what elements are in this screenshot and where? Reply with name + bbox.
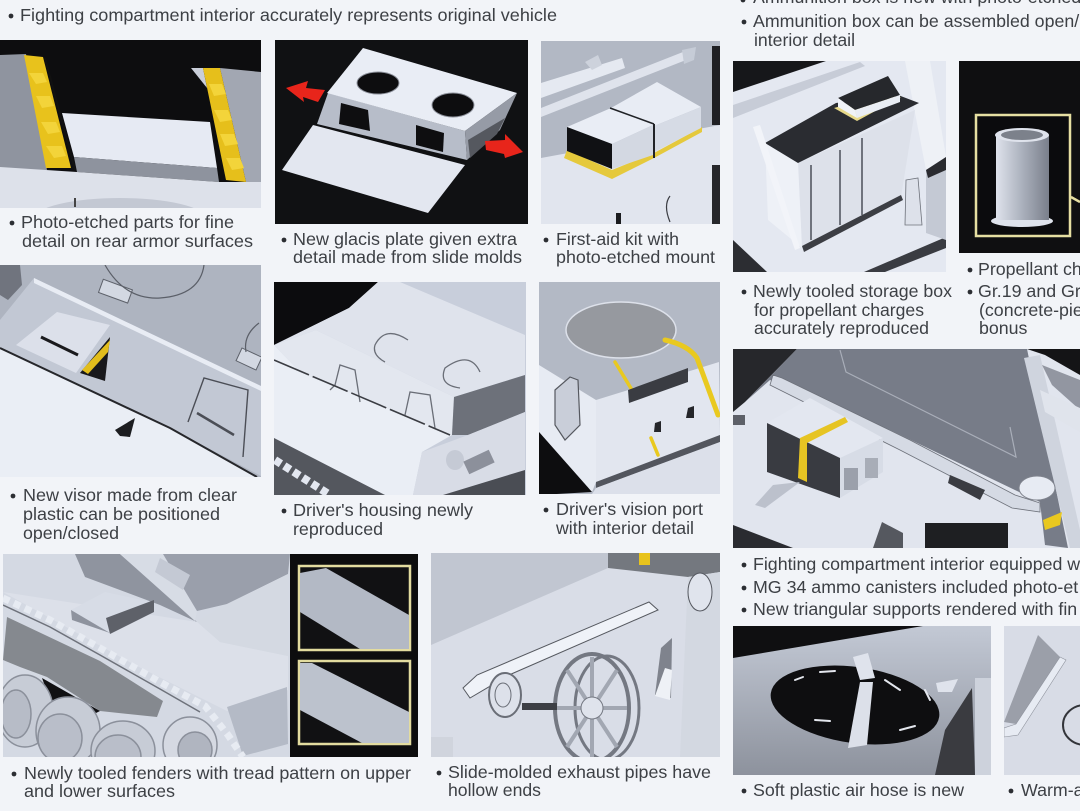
spoked wheel: [555, 654, 639, 762]
panel: exhaust pipes: [431, 551, 720, 762]
panel: glacis plate: [275, 40, 528, 224]
red arrow right: [485, 134, 523, 158]
panel: warm-air detail: [1004, 626, 1080, 775]
caption: exhaust pipes: Slide-molded exhaust pipes have: [448, 762, 711, 782]
panel: driver's housing: [274, 282, 526, 495]
caption: propellant charges: Gr.19 and Gr: [978, 281, 1080, 301]
caption: ammunition box: [741, 0, 1080, 50]
caption: driver's housing: reproduced: [293, 519, 383, 539]
caption: exhaust pipes: [437, 762, 711, 800]
caption: propellant charges: bonus: [979, 318, 1028, 338]
panel: fenders: [3, 554, 290, 757]
hose clamp: [848, 653, 875, 748]
caption: exhaust pipes: hollow ends: [448, 780, 541, 800]
caption: storage box: for propellant charges: [754, 300, 924, 320]
caption: propellant charges: [968, 259, 1080, 338]
caption: driver's housing: [282, 500, 473, 539]
panel: tread inset: [290, 554, 418, 757]
caption: clear visor: plastic can be positioned: [23, 504, 220, 524]
exhaust rods: [541, 47, 696, 117]
open visor flap: [16, 312, 110, 381]
caption: fighting compartment equipment: [742, 554, 1080, 619]
caption: driver's housing: Driver's housing newly: [293, 500, 473, 520]
ammo case on top: [834, 76, 901, 121]
caption: storage box: accurately reproduced: [754, 318, 929, 338]
caption: fenders: [12, 763, 411, 801]
caption: storage box: Newly tooled storage box: [753, 281, 952, 301]
caption: vision port: Driver's vision port: [556, 499, 703, 519]
caption: glacis plate: [282, 229, 522, 267]
hatches: [274, 334, 480, 435]
yellow photo-etched strip left: [24, 55, 75, 170]
caption: ammunition box: interior detail: [754, 30, 855, 50]
caption: clear visor: [11, 485, 237, 543]
hatch openings: [357, 72, 474, 117]
caption: fighting compartment equipment: MG 34 ammo canisters included photo-et: [753, 577, 1078, 597]
panel: first-aid kit: [541, 41, 720, 224]
hose coil: [770, 666, 940, 744]
storage box body: [765, 95, 919, 252]
port circular plate: [566, 302, 676, 358]
caption: propellant charges: (concrete-pie: [979, 300, 1080, 320]
first-aid boxes: [564, 82, 702, 179]
yellow strap: [798, 417, 848, 482]
caption: glacis plate: detail made from slide molds: [293, 247, 522, 267]
stowage box: [71, 600, 154, 634]
yellow photo-etched strip right: [203, 68, 246, 182]
hinge plates: [99, 279, 262, 370]
inset: upper tread: [299, 566, 410, 650]
caption: fenders: and lower surfaces: [24, 781, 175, 801]
exhaust pipe: [463, 602, 658, 717]
caption: photo-etched parts: [10, 212, 253, 251]
caption: first-aid kit: photo-etched mount: [556, 247, 715, 267]
yellow tape: [615, 340, 718, 455]
caption: photo-etched parts: Photo-etched parts for fine: [21, 212, 234, 232]
caption: clear visor: open/closed: [23, 523, 119, 543]
caption: vision port: [544, 499, 703, 538]
caption: storage box: [742, 281, 952, 338]
panel: clear visor: [0, 265, 262, 477]
caption: photo-etched parts: detail on rear armor surfaces: [22, 231, 253, 251]
caption: fighting compartment interior: Fighting compartment interior accurately represents original vehicle: [20, 5, 557, 25]
caption: first-aid kit: [544, 229, 715, 267]
caption: vision port: with interior detail: [555, 518, 694, 538]
caption: propellant charges: Propellant ch: [978, 259, 1080, 279]
closed visor: [188, 378, 248, 457]
caption: air hose: Soft plastic air hose is new: [753, 780, 964, 800]
MG 34 ammo canisters: [767, 398, 883, 498]
red arrow left: [286, 81, 325, 102]
road wheels: [3, 674, 218, 757]
panel: storage box: [733, 61, 946, 272]
panel: air hose: [733, 626, 991, 775]
caption: glacis plate: New glacis plate given extra: [293, 229, 517, 249]
caption: clear visor: New visor made from clear: [23, 485, 237, 505]
inset frame: [976, 115, 1070, 236]
inset: lower tread: [299, 661, 410, 744]
caption: fenders: Newly tooled fenders with tread pattern on upper: [24, 763, 411, 783]
caption: fighting compartment equipment: Fighting compartment interior equipped w: [753, 554, 1080, 574]
fender tread edge: [3, 598, 243, 757]
caption: first-aid kit: First-aid kit with: [556, 229, 679, 249]
propellant cylinder: [991, 128, 1053, 227]
panel: rear armor photo-etched parts: [0, 40, 261, 208]
panel: vision port: [539, 282, 720, 495]
caption: fighting compartment equipment: New triangular supports rendered with fin: [753, 599, 1077, 619]
panel: fighting compartment: [733, 349, 1080, 548]
panel: propellant charge: [959, 61, 1080, 253]
caption: ammunition box: Ammunition box can be assembled open/: [753, 11, 1079, 31]
MG barrel: [770, 375, 1055, 512]
